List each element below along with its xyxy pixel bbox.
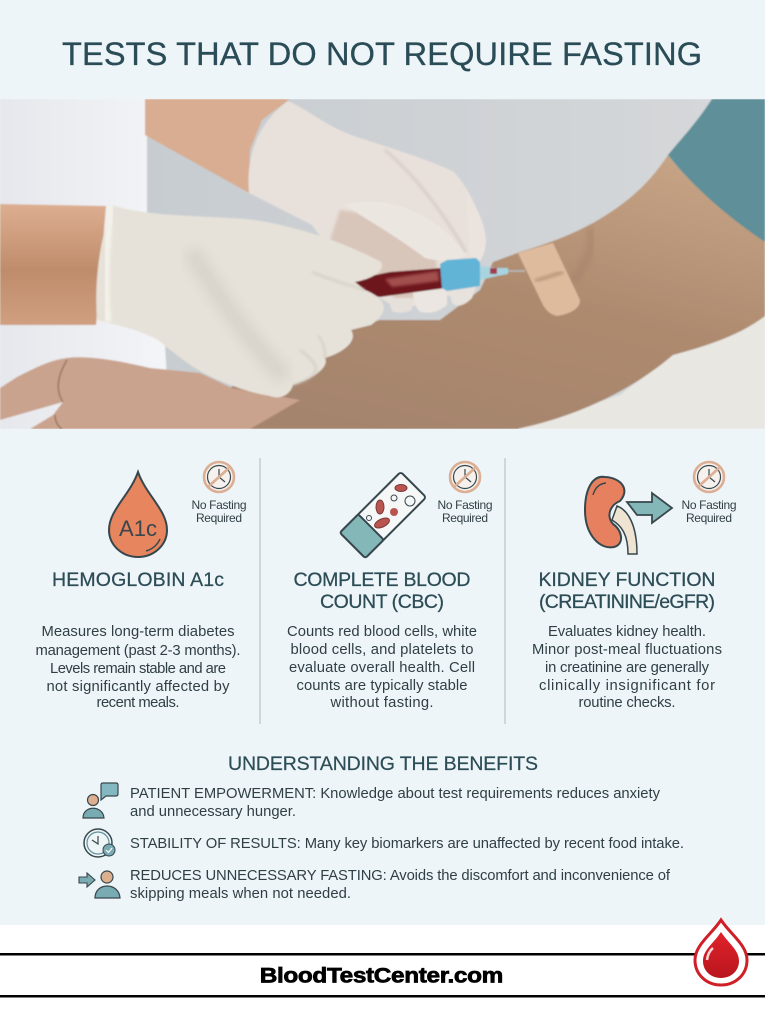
blood tube: [354, 267, 443, 298]
heading: [294, 569, 470, 613]
panel: hemoglobin A1c: [36, 462, 246, 711]
description: Evaluates kidney health.: [548, 624, 706, 640]
no fasting label: Required: [442, 511, 488, 525]
description: counts are typically stable: [296, 678, 468, 694]
title: TESTS THAT DO NOT REQUIRE FASTING: [62, 36, 702, 72]
patient's hand: [0, 357, 300, 429]
description: [287, 624, 477, 711]
description: in creatinine are generally: [545, 660, 710, 676]
description: Minor post-meal fluctuations: [532, 642, 722, 658]
heading: COUNT (CBC): [320, 591, 444, 613]
benefits heading: UNDERSTANDING THE BENEFITS: [228, 753, 538, 775]
description: routine checks.: [578, 695, 676, 711]
description: recent meals.: [96, 695, 180, 711]
description: without fasting.: [330, 695, 434, 711]
benefit text: reduces unnecessary fasting: REDUCES UNNECESSARY FASTING: Avoids the discomfort and inconvenience of: [130, 868, 671, 884]
icon: blood drop logo: [695, 920, 747, 985]
photo: nurse drawing blood from a patient's arm: [0, 99, 765, 429]
no fasting label: No Fasting: [438, 498, 492, 512]
description: Measures long-term diabetes: [42, 624, 234, 640]
description: not significantly affected by: [46, 679, 230, 695]
icon: person with speech bubble: [83, 783, 118, 818]
icon: A1c blood drop: A1c: [119, 516, 157, 541]
no fasting label: No Fasting: [682, 498, 736, 512]
description: blood cells, and platelets to: [290, 642, 474, 658]
benefit text: patient empowerment: [130, 786, 661, 820]
no fasting label: [682, 498, 736, 525]
heading: [538, 569, 716, 613]
description: Levels remain stable and are: [50, 661, 226, 677]
description: clinically insignificant for: [539, 678, 715, 694]
description: evaluate overall health. Cell: [289, 660, 475, 676]
panel: kidney function: [532, 462, 736, 711]
sleeve: [668, 99, 765, 242]
website name: BloodTestCenter.com: [260, 963, 503, 987]
heading: (CREATININE/eGFR): [539, 591, 715, 613]
no fasting label: [192, 498, 246, 525]
description: management (past 2-3 months).: [36, 643, 240, 659]
no fasting label: [438, 498, 492, 525]
patient's arm: [200, 155, 765, 429]
icon: blood test strip: [340, 472, 426, 558]
benefit text: stability of results: STABILITY OF RESULTS: Many key biomarkers are unaffected by recent food intake.: [130, 836, 684, 852]
icon: kidney with arrow: [585, 477, 672, 554]
upper glove: [248, 101, 486, 310]
panel: benefits list: [79, 783, 684, 902]
icon: no fasting clock: [204, 462, 234, 492]
heading: KIDNEY FUNCTION: [538, 569, 716, 591]
description: [36, 624, 240, 711]
divider lines between columns: [260, 458, 505, 724]
icon: clock with check: [84, 829, 115, 857]
icon: arrow into person: [79, 871, 120, 898]
footer: [0, 920, 765, 1024]
benefit text: reduces unnecessary fasting: skipping meals when not needed.: [130, 886, 351, 902]
description: [532, 624, 722, 711]
no fasting label: Required: [196, 511, 242, 525]
blue needle holder: [440, 258, 480, 291]
no fasting label: No Fasting: [192, 498, 246, 512]
no fasting label: Required: [686, 511, 732, 525]
benefit text: reduces unnecessary fasting: [130, 868, 671, 902]
panel: complete blood count: [287, 462, 492, 711]
benefit text: patient empowerment: and unnecessary hunger.: [130, 804, 296, 820]
icon: no fasting clock: [694, 462, 724, 492]
benefit text: patient empowerment: PATIENT EMPOWERMENT: Knowledge about test requirements reduces anxiety: [130, 786, 661, 802]
icon: A1c blood drop: [109, 472, 167, 557]
heading: COMPLETE BLOOD: [294, 569, 470, 591]
bandage: [518, 243, 580, 316]
sheet: [517, 316, 765, 429]
lower glove: [96, 205, 384, 397]
fingers under the tube: [388, 298, 412, 313]
icon: no fasting clock: [450, 462, 480, 492]
description: Counts red blood cells, white: [287, 624, 477, 640]
heading: HEMOGLOBIN A1c: [52, 569, 224, 591]
